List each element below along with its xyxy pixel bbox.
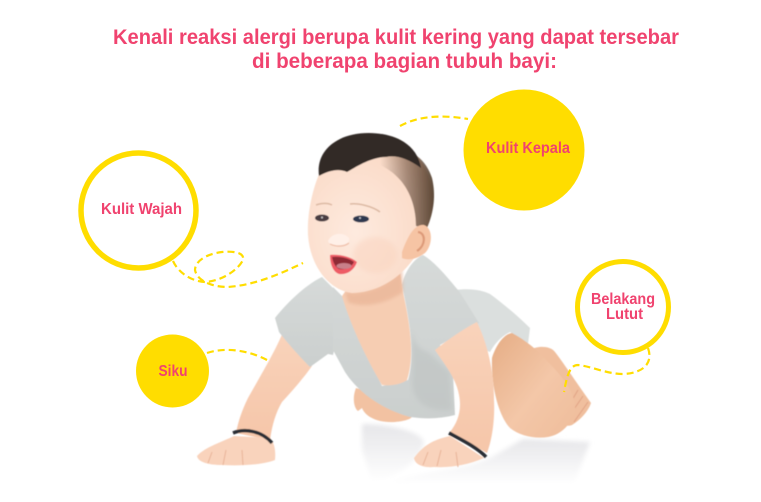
circle: belakang lutut: Lutut [606,306,643,323]
title [113,26,679,73]
mouth [332,257,354,269]
nose [328,234,349,245]
chest [342,272,411,385]
circle: kulit wajah: Kulit Wajah [101,201,182,218]
inner ear [417,232,424,251]
cheek blush [353,237,397,273]
right bracelet [449,433,486,457]
circle: kulit wajah [81,153,196,268]
left fingers [208,450,243,465]
circle: kulit kepala [464,90,584,210]
connector: kulit kepala [400,117,468,126]
toes [565,390,588,422]
shirt front [333,255,479,418]
lower lip [330,255,357,274]
foot [530,347,591,426]
back of shirt [455,289,530,352]
thigh [492,333,575,438]
left arm [236,332,312,440]
circle: siku [136,334,209,408]
ear [402,225,431,259]
baby illustration [197,133,591,467]
connector: kulit wajah [173,252,303,287]
brows [316,204,380,212]
connector: siku [207,350,267,360]
hair [319,133,421,176]
left bracelet [233,431,272,443]
circle: siku: Siku [158,363,188,380]
neck shadow [345,268,403,305]
left hand [197,436,275,465]
right arm [435,322,494,453]
circle: belakang lutut [578,262,668,352]
circle: kulit kepala: Kulit Kepala [486,140,570,157]
left sleeve [275,277,345,367]
right hand [414,436,484,467]
title: Kenali reaksi alergi berupa kulit kering yang dapat tersebar [113,26,679,49]
right eye [353,216,369,222]
nose shadow [330,243,349,246]
title: di beberapa bagian tubuh bayi: [252,50,557,73]
floor reflection [362,424,590,484]
right fingers [423,450,458,467]
connector: belakang lutut [564,348,649,392]
head [308,141,433,293]
far knee [354,388,412,422]
side hair [380,148,434,228]
shirt fold shading [412,325,452,410]
tongue [336,263,352,269]
left eye [315,214,329,222]
circle: belakang lutut: Belakang [591,291,655,308]
